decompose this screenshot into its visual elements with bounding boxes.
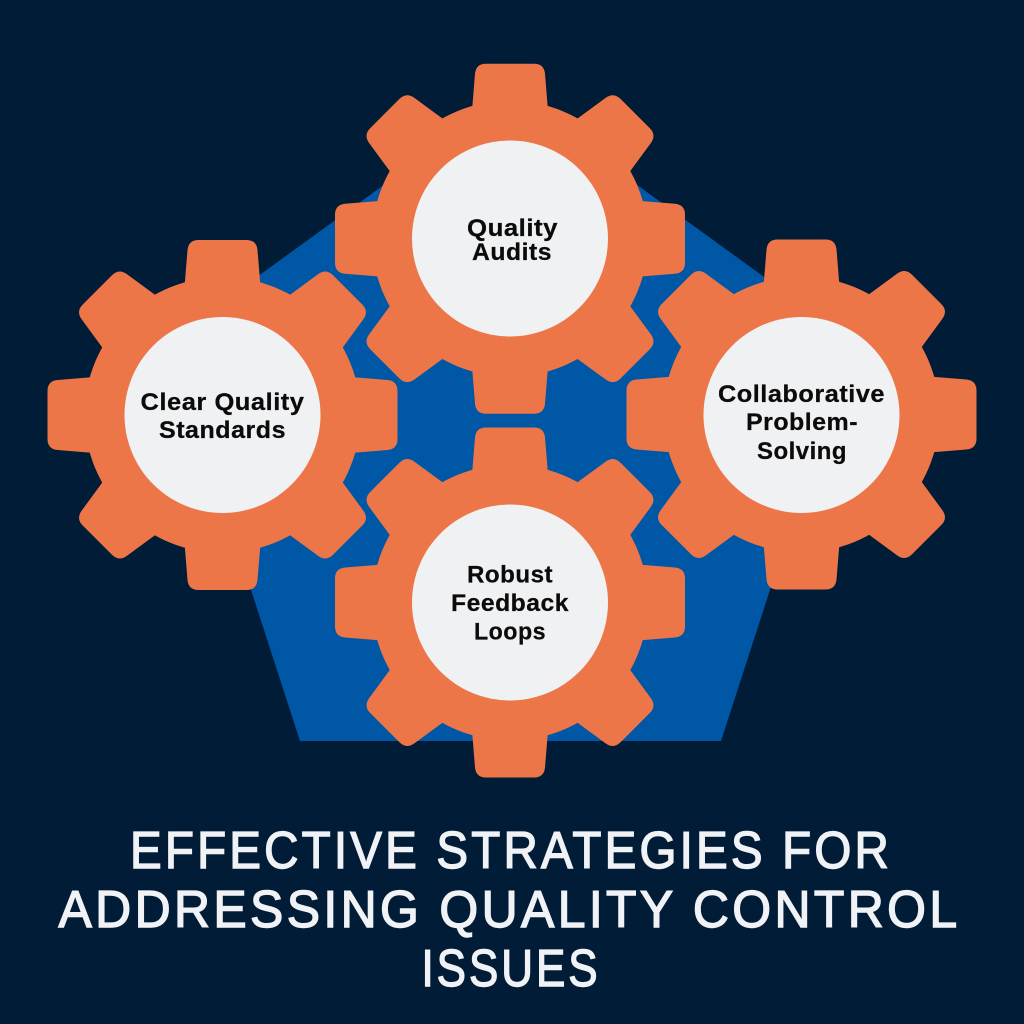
label: Clear Quality Standards: Standards bbox=[159, 417, 286, 444]
label: Quality Audits bbox=[467, 215, 558, 266]
label: Robust Feedback Loops: Feedback bbox=[451, 590, 569, 617]
label: Collaborative Problem-Solving: Collaborative bbox=[718, 381, 885, 408]
label: Collaborative Problem-Solving bbox=[718, 381, 885, 465]
label: Quality Audits: Quality bbox=[467, 215, 558, 242]
label: Collaborative Problem-Solving: Problem- bbox=[746, 409, 858, 436]
label: Robust Feedback Loops bbox=[451, 562, 569, 646]
blue pentagon backdrop bbox=[170, 93, 851, 741]
label: Collaborative Problem-Solving: Solving bbox=[757, 438, 847, 465]
label: Clear Quality Standards bbox=[140, 389, 304, 444]
title: ADDRESSING QUALITY CONTROL bbox=[58, 881, 960, 939]
label: Robust Feedback Loops: Loops bbox=[474, 618, 546, 646]
label: Robust Feedback Loops: Robust bbox=[467, 562, 553, 588]
label: Quality Audits: Audits bbox=[472, 239, 552, 266]
title bbox=[58, 822, 960, 998]
title: ISSUES bbox=[422, 940, 600, 998]
gear: Clear Quality Standards bbox=[48, 240, 398, 590]
label: Clear Quality Standards: Clear Quality bbox=[140, 389, 304, 416]
gear: Collaborative Problem-Solving bbox=[626, 240, 976, 590]
title: EFFECTIVE STRATEGIES FOR bbox=[130, 822, 892, 880]
gear: Quality Audits bbox=[335, 64, 685, 414]
gear: Robust Feedback Loops bbox=[335, 428, 685, 778]
